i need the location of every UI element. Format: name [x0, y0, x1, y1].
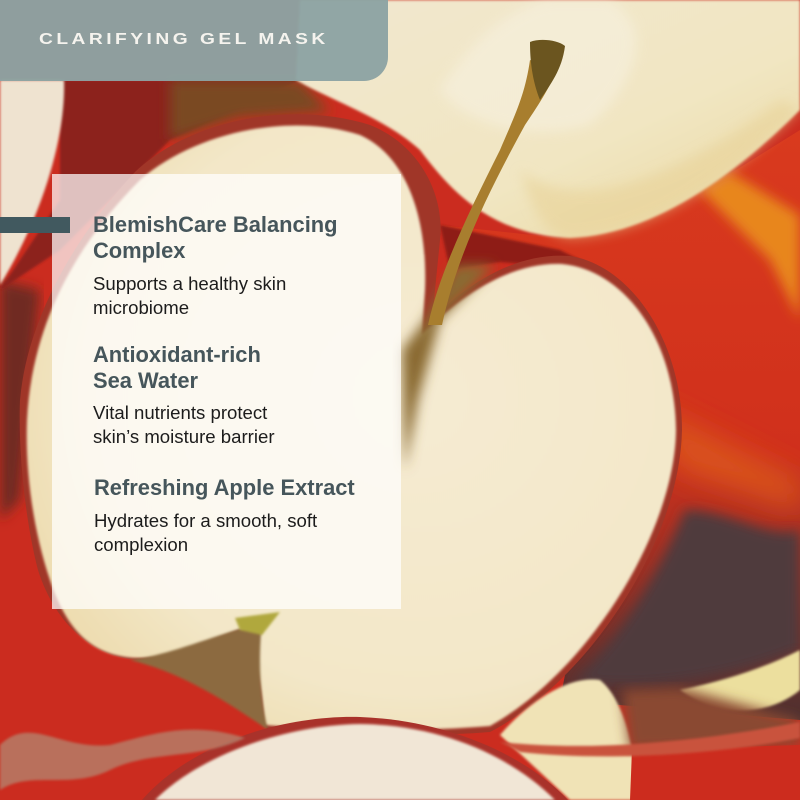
panel: ingredients	[52, 174, 401, 609]
left apple slice	[0, 80, 64, 285]
apple stem	[428, 40, 565, 325]
green core patch	[130, 622, 268, 730]
ingredient 2 description	[93, 402, 275, 447]
left dark zone	[0, 280, 40, 520]
banner title: CLARIFYING GEL MASK	[39, 31, 329, 48]
ingredient 1 heading: BlemishCare Balancing	[93, 212, 338, 237]
ingredient 3 description	[94, 510, 318, 555]
dark bubbly apple skin	[572, 510, 800, 685]
ingredient 2 description: Vital nutrients protect	[93, 402, 267, 423]
main apple flesh	[27, 125, 676, 730]
header banner	[0, 0, 388, 81]
water splash	[0, 730, 245, 790]
bottom right apple pieces	[500, 650, 800, 800]
ingredient 1 description: microbiome	[93, 297, 189, 318]
main apple skin outline	[20, 114, 682, 735]
ingredient 3 heading: Refreshing Apple Extract	[94, 475, 355, 500]
ingredient 1 description	[93, 273, 286, 318]
right apple skin	[440, 130, 800, 720]
stem hollow	[402, 265, 495, 470]
ingredient 2 heading: Sea Water	[93, 368, 198, 393]
ingredient 3 description: complexion	[94, 534, 188, 555]
ingredient 1 description: Supports a healthy skin	[93, 273, 286, 294]
ingredient 3 description: Hydrates for a smooth, soft	[94, 510, 317, 531]
ingredient 2 description: skin’s moisture barrier	[93, 426, 275, 447]
bottom apple slice	[142, 717, 568, 800]
ingredient 2 heading: Antioxidant-rich	[93, 342, 261, 367]
accent bar	[0, 217, 70, 233]
ingredient 1 heading	[93, 212, 338, 263]
ingredient 1 heading: Complex	[93, 238, 185, 263]
ingredient 2 heading	[93, 342, 261, 393]
top right apple slice	[296, 0, 800, 238]
